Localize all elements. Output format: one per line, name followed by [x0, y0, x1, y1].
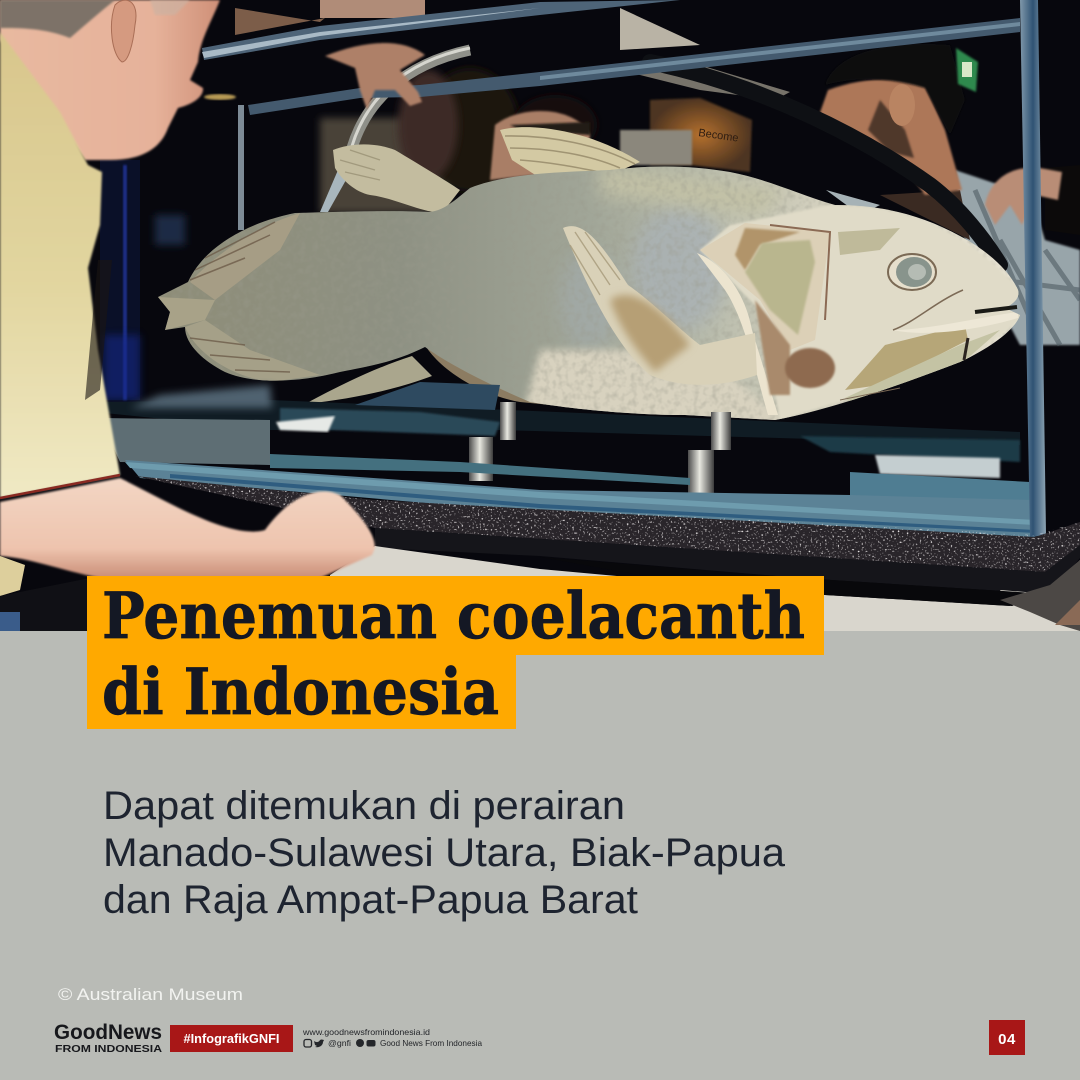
pectoral fin: [563, 226, 757, 385]
description text: dan Raja Ampat-Papua Barat: [103, 878, 638, 922]
man's forearm and hand on tank: [0, 478, 375, 578]
GoodNews From Indonesia logo: [54, 1021, 162, 1055]
man's shirt: [0, 32, 120, 498]
icon: facebook: [356, 1039, 364, 1047]
contact details and social icons: [302, 1027, 482, 1048]
body shading and scale texture: [150, 160, 1030, 430]
glass tank right post: [1020, 0, 1046, 537]
coelacanth: [150, 127, 1030, 430]
contact details and social icons: www.goodnewsfromindonesia.id: [302, 1027, 430, 1037]
floor under tank: [330, 546, 1080, 631]
contact details and social icons: @gnfi: [328, 1038, 351, 1048]
tank backdrop: [100, 0, 790, 400]
fish eye: [888, 254, 936, 290]
person behind the tank, centre: [398, 68, 597, 192]
icon: twitter: [314, 1040, 324, 1047]
title line 2: di Indonesia: [102, 655, 499, 730]
GoodNews From Indonesia logo: GoodNews: [54, 1021, 162, 1044]
photo: coelacanth in a glass tank: [0, 0, 1080, 631]
description text: [103, 784, 786, 922]
page number badge: 04: [998, 1031, 1016, 1048]
upper glass rails: [202, 0, 1020, 115]
speckled gravel tank base: [130, 470, 1080, 594]
icon: instagram: [304, 1040, 312, 1047]
lower jaw plates: [845, 325, 968, 390]
mouth and facial lines: [840, 290, 1017, 400]
man's raised hand on the pipe: [235, 8, 425, 110]
black air hose: [650, 62, 1000, 265]
water surface and stones at tank floor: [92, 382, 1020, 478]
steel inlet pipe with water stream: [320, 48, 470, 212]
orange display box with lettering: [620, 98, 752, 172]
orange display box with lettering: Become: [698, 127, 739, 145]
gill cover: [697, 253, 778, 415]
man in the foreground: [0, 0, 375, 631]
title block on orange highlight: [87, 576, 824, 730]
steel supports under fish: [469, 402, 731, 494]
glass tank bottom: [125, 454, 1035, 540]
person behind the tank, right, with beard: [818, 44, 1080, 345]
title line 1: Penemuan coelacanth: [102, 579, 805, 654]
page number badge: [989, 1020, 1025, 1055]
head: [700, 205, 1020, 420]
hashtag badge: [170, 1025, 293, 1052]
description text: Manado-Sulawesi Utara, Biak-Papua: [103, 831, 786, 875]
anal and pelvic fins: [305, 356, 432, 404]
second dorsal fin: [333, 144, 460, 213]
photo credit: © Australian Museum: [58, 985, 243, 1004]
hashtag badge: #InfografikGNFI: [184, 1032, 280, 1046]
icon: youtube: [366, 1040, 376, 1046]
fish body: [158, 166, 1020, 420]
first dorsal fin: [500, 127, 640, 178]
description text: Dapat ditemukan di perairan: [103, 784, 625, 828]
contact details and social icons: Good News From Indonesia: [380, 1038, 482, 1048]
GoodNews From Indonesia logo: FROM INDONESIA: [55, 1043, 162, 1055]
